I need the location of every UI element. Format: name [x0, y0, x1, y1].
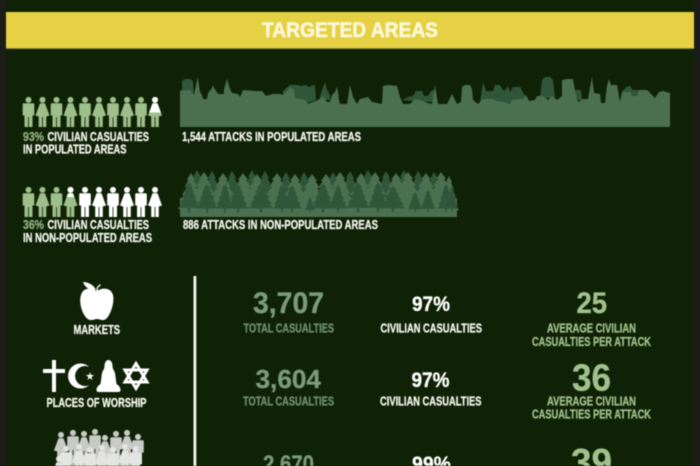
stat: 3,604 total casualties [243, 364, 334, 408]
stat: 3,604 total casualties: 3,604 [256, 364, 322, 394]
icon: crescent and star [68, 364, 89, 388]
icon: buddha [96, 360, 120, 392]
title: TARGETED AREAS [262, 19, 438, 42]
text: 93% civilian casualties: CIVILIAN CASUALTIES [48, 130, 149, 144]
stat: 3,707 total casualties: 3,707 [253, 287, 324, 320]
text: 1,544 attacks: 1,544 ATTACKS IN POPULATED AREAS [182, 130, 361, 144]
title banner [6, 12, 694, 49]
stats row: markets [244, 287, 651, 349]
vertical divider [194, 276, 196, 466]
icon: cross [43, 360, 65, 392]
stats row: third category [263, 442, 612, 466]
stat: 97% civilian casualties: CIVILIAN CASUALTIES [380, 394, 482, 408]
icon: apple [80, 282, 113, 320]
label: markets: MARKETS [74, 323, 120, 337]
stat: 25 average civilian casualties per attack [532, 287, 651, 349]
icon: crowd [52, 429, 144, 466]
text: 36% civilian casualties: CIVILIAN CASUALTIES [48, 218, 149, 232]
stat: 3,707 total casualties: TOTAL CASUALTIES [244, 322, 334, 336]
stat: 25 average civilian casualties per attack: 25 [576, 287, 607, 320]
text: 36% civilian casualties [23, 218, 152, 245]
text: 36% civilian casualties: 36% [23, 218, 44, 232]
stat: 97% civilian casualties [380, 293, 482, 336]
stat: 97% civilian casualties: 97% [412, 293, 450, 316]
stat: 97% civilian casualties: CIVILIAN CASUALTIES [380, 322, 482, 336]
stat: 36 average civilian casualties per attack: AVERAGE CIVILIAN [547, 394, 636, 408]
text: 93% civilian casualties: 93% [23, 130, 44, 144]
stat: 36 average civilian casualties per attack: 36 [572, 358, 611, 400]
stat: 36 average civilian casualties per attack [532, 358, 651, 422]
stat: 97% civilian casualties [380, 369, 482, 408]
icons: places of worship [43, 360, 147, 392]
stat: 36 average civilian casualties per attack: CASUALTIES PER ATTACK [532, 408, 651, 422]
icon row: 36% civilian casualties in non-populated areas [23, 187, 162, 217]
text: 93% civilian casualties [23, 130, 149, 156]
icon row: 93% civilian casualties in populated areas [23, 97, 162, 127]
stat: 25 average civilian casualties per attack: CASUALTIES PER ATTACK [532, 335, 651, 349]
text: 886 attacks: 886 ATTACKS IN NON-POPULATED AREAS [183, 218, 378, 232]
skyline: populated areas [180, 77, 670, 127]
text: 93% civilian casualties: IN POPULATED AREAS [23, 142, 126, 156]
label: places of worship: PLACES OF WORSHIP [46, 396, 146, 410]
icon: star of david [125, 364, 147, 388]
forest: non-populated areas [178, 170, 459, 217]
stat: 3,604 total casualties: TOTAL CASUALTIES [243, 394, 334, 408]
stat: 3,707 total casualties [244, 287, 334, 336]
stat: 97% civilian casualties: 97% [412, 369, 450, 392]
stats row: places of worship [243, 358, 651, 422]
stat: 25 average civilian casualties per attack: AVERAGE CIVILIAN [547, 322, 636, 336]
text: 36% civilian casualties: IN NON-POPULATED AREAS [23, 231, 152, 245]
